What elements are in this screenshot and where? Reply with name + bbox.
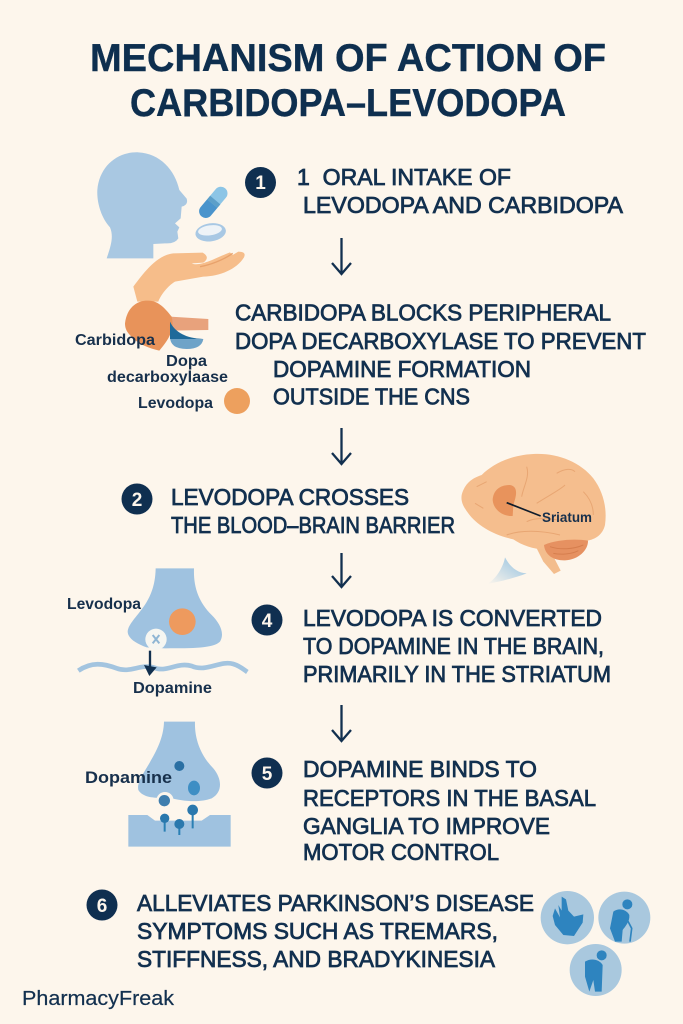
carbidopa text: [235, 300, 646, 410]
step 5 text: MOTOR CONTROL: [303, 839, 499, 865]
step 6 text: STIFFNESS, AND BRADYKINESIA: [137, 946, 495, 972]
panel: step 1 oral intake: [97, 152, 623, 302]
step 1 text: 1 ORAL INTAKE OF: [297, 164, 511, 190]
label: Dopa decarboxylaase: Dopa: [166, 353, 207, 370]
title: MECHANISM OF ACTION OF: [90, 37, 606, 80]
label: Levodopa: Levodopa: [67, 596, 141, 613]
step 1 text: LEVODOPA AND CARBIDOPA: [303, 192, 623, 218]
step number 2: [122, 484, 152, 514]
step 5 text: [303, 756, 596, 865]
step 2 text: [171, 484, 455, 538]
step 5 text: GANGLIA TO IMPROVE: [303, 813, 550, 839]
label: Dopa decarboxylaase: decarboxylaase: [107, 369, 228, 386]
step number 6: 6: [97, 896, 107, 917]
label: Sriatum: Sriatum: [542, 509, 592, 525]
step 4 text: [303, 605, 611, 687]
step number 5: [252, 758, 282, 788]
label: Dopamine: Dopamine: [133, 680, 212, 697]
arrow: [332, 238, 351, 274]
step 4 text: PRIMARILY IN THE STRIATUM: [303, 661, 611, 687]
arrow: [332, 705, 351, 741]
panel: step 5 receptor binding: [85, 722, 596, 865]
step number 1: [245, 167, 276, 198]
step 5 text: DOPAMINE BINDS TO: [303, 756, 537, 782]
step 4 text: LEVODOPA IS CONVERTED: [303, 605, 602, 631]
panel: step carbidopa blocks decarboxylase: [75, 300, 646, 414]
diagram: synapse with receptors: [128, 722, 231, 847]
step number 5: 5: [262, 764, 273, 785]
step number 6: [86, 890, 118, 920]
label: Dopa decarboxylaase: [107, 353, 228, 386]
carbidopa text: CARBIDOPA BLOCKS PERIPHERAL: [235, 300, 611, 326]
diagram: liver and enzyme: [125, 301, 208, 351]
arrow: [332, 553, 351, 587]
panel: step 4 conversion to dopamine: [67, 568, 611, 697]
icon: brain with striatum: [461, 454, 606, 584]
step number 4: [252, 604, 282, 636]
step 1 text: [297, 164, 623, 218]
diagram: presynaptic terminal with levodopa: [78, 568, 247, 676]
step 5 text: RECEPTORS IN THE BASAL: [303, 785, 596, 811]
icon: head, pills and hand: [97, 152, 245, 302]
carbidopa text: DOPA DECARBOXYLASE TO PREVENT: [235, 328, 646, 354]
icons: Parkinson's symptoms: [541, 891, 650, 996]
label: Carbidopa: Carbidopa: [75, 332, 155, 349]
step 6 text: [137, 890, 534, 972]
step number 2: 2: [132, 490, 142, 511]
step 2 text: LEVODOPA CROSSES: [171, 484, 409, 510]
step 4 text: TO DOPAMINE IN THE BRAIN,: [303, 633, 604, 659]
icon: levodopa dot: [224, 388, 250, 414]
brand: PharmacyFreak: [22, 988, 175, 1010]
title: CARBIDOPA–LEVODOPA: [130, 82, 566, 125]
step 2 text: THE BLOOD–BRAIN BARRIER: [171, 512, 455, 538]
carbidopa text: OUTSIDE THE CNS: [273, 384, 470, 410]
step 6 text: SYMPTOMS SUCH AS TREMARS,: [137, 918, 498, 944]
step 6 text: ALLEVIATES PARKINSON’S DISEASE: [137, 890, 534, 916]
label: Levodopa: Levodopa: [138, 395, 213, 412]
label: Dopamine: Dopamine: [85, 768, 172, 787]
step number 4: 4: [262, 611, 273, 632]
panel: step 6 symptom relief: [86, 890, 650, 996]
title: [90, 37, 606, 125]
arrow: [332, 428, 351, 464]
carbidopa text: DOPAMINE FORMATION: [273, 356, 531, 382]
panel: step 2 blood-brain barrier: [122, 454, 606, 584]
step number 1: 1: [255, 173, 266, 194]
